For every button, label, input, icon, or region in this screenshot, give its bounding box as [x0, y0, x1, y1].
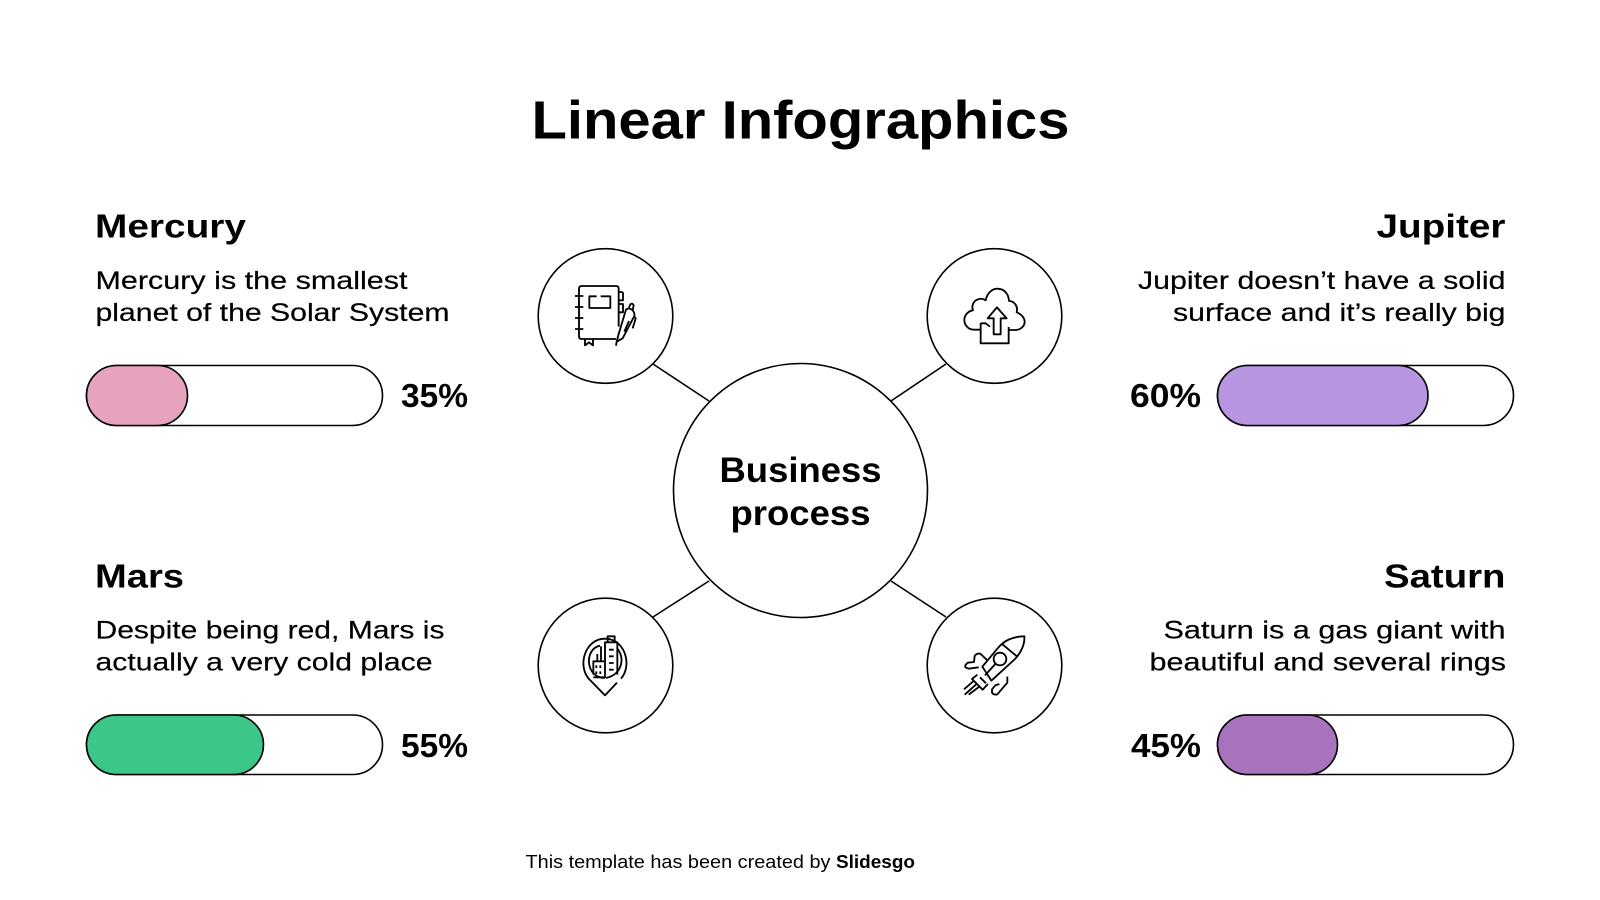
text block: Jupiter description: Jupiter doesn’t have a solid	[1138, 267, 1506, 295]
panel: Mercury	[86, 208, 468, 426]
text block: Saturn description: beautiful and several rings	[1150, 648, 1506, 676]
heading: Mercury: Mercury	[95, 208, 247, 244]
connector: top left	[653, 364, 709, 401]
panel: Mars	[86, 558, 468, 774]
central circle	[674, 364, 928, 618]
node circle: rocket	[927, 598, 1062, 733]
icon: city location pin	[583, 636, 626, 695]
text block: Mars description: actually a very cold place	[96, 648, 432, 676]
value: 35%: 35%	[401, 377, 468, 414]
connector: bottom right	[891, 581, 946, 617]
heading: Jupiter: Jupiter	[1376, 208, 1506, 244]
text block: Mercury description: Mercury is the smallest	[96, 267, 408, 295]
progress bar: Saturn 45%	[1218, 715, 1514, 774]
heading: Saturn: Saturn	[1384, 558, 1506, 594]
text block: Mercury description: planet of the Solar System	[96, 299, 450, 327]
progress bar: Jupiter 60%	[1218, 366, 1514, 426]
footer credit: This template has been created by	[526, 851, 831, 872]
text block: Mars description: Despite being red, Mars is	[96, 616, 445, 644]
text block: Jupiter description: surface and it’s really big	[1173, 299, 1506, 327]
text block: Saturn description	[1150, 616, 1506, 676]
node circle: location	[538, 598, 673, 733]
value: 55%: 55%	[401, 727, 468, 764]
icon: notebook and pen	[575, 286, 636, 346]
progress bar: Mars 55%	[86, 715, 382, 774]
connector: bottom left	[653, 581, 709, 617]
icon: rocket	[964, 636, 1024, 695]
progress bar: Mercury 35%	[86, 366, 382, 426]
central label: process	[730, 494, 870, 533]
heading: Mars: Mars	[95, 558, 184, 594]
text block: Mars description	[96, 616, 445, 676]
value: 45%: 45%	[1131, 727, 1201, 764]
node circle: notebook	[538, 249, 673, 383]
panel: Jupiter	[1130, 208, 1514, 426]
icon: cloud upload	[964, 289, 1025, 343]
central label: Business	[720, 451, 882, 490]
central label	[720, 451, 882, 533]
panel: Saturn	[1131, 558, 1514, 774]
diagram: hub and spokes	[538, 249, 1062, 733]
title: Linear Infographics	[532, 90, 1070, 150]
text block: Jupiter description	[1138, 267, 1506, 327]
connector: top right	[891, 364, 946, 401]
text block: Mercury description	[96, 267, 450, 327]
value: 60%: 60%	[1130, 377, 1201, 414]
footer credit: Slidesgo	[836, 851, 915, 872]
text block: Saturn description: Saturn is a gas giant with	[1164, 616, 1506, 644]
node circle: cloud	[927, 249, 1062, 383]
